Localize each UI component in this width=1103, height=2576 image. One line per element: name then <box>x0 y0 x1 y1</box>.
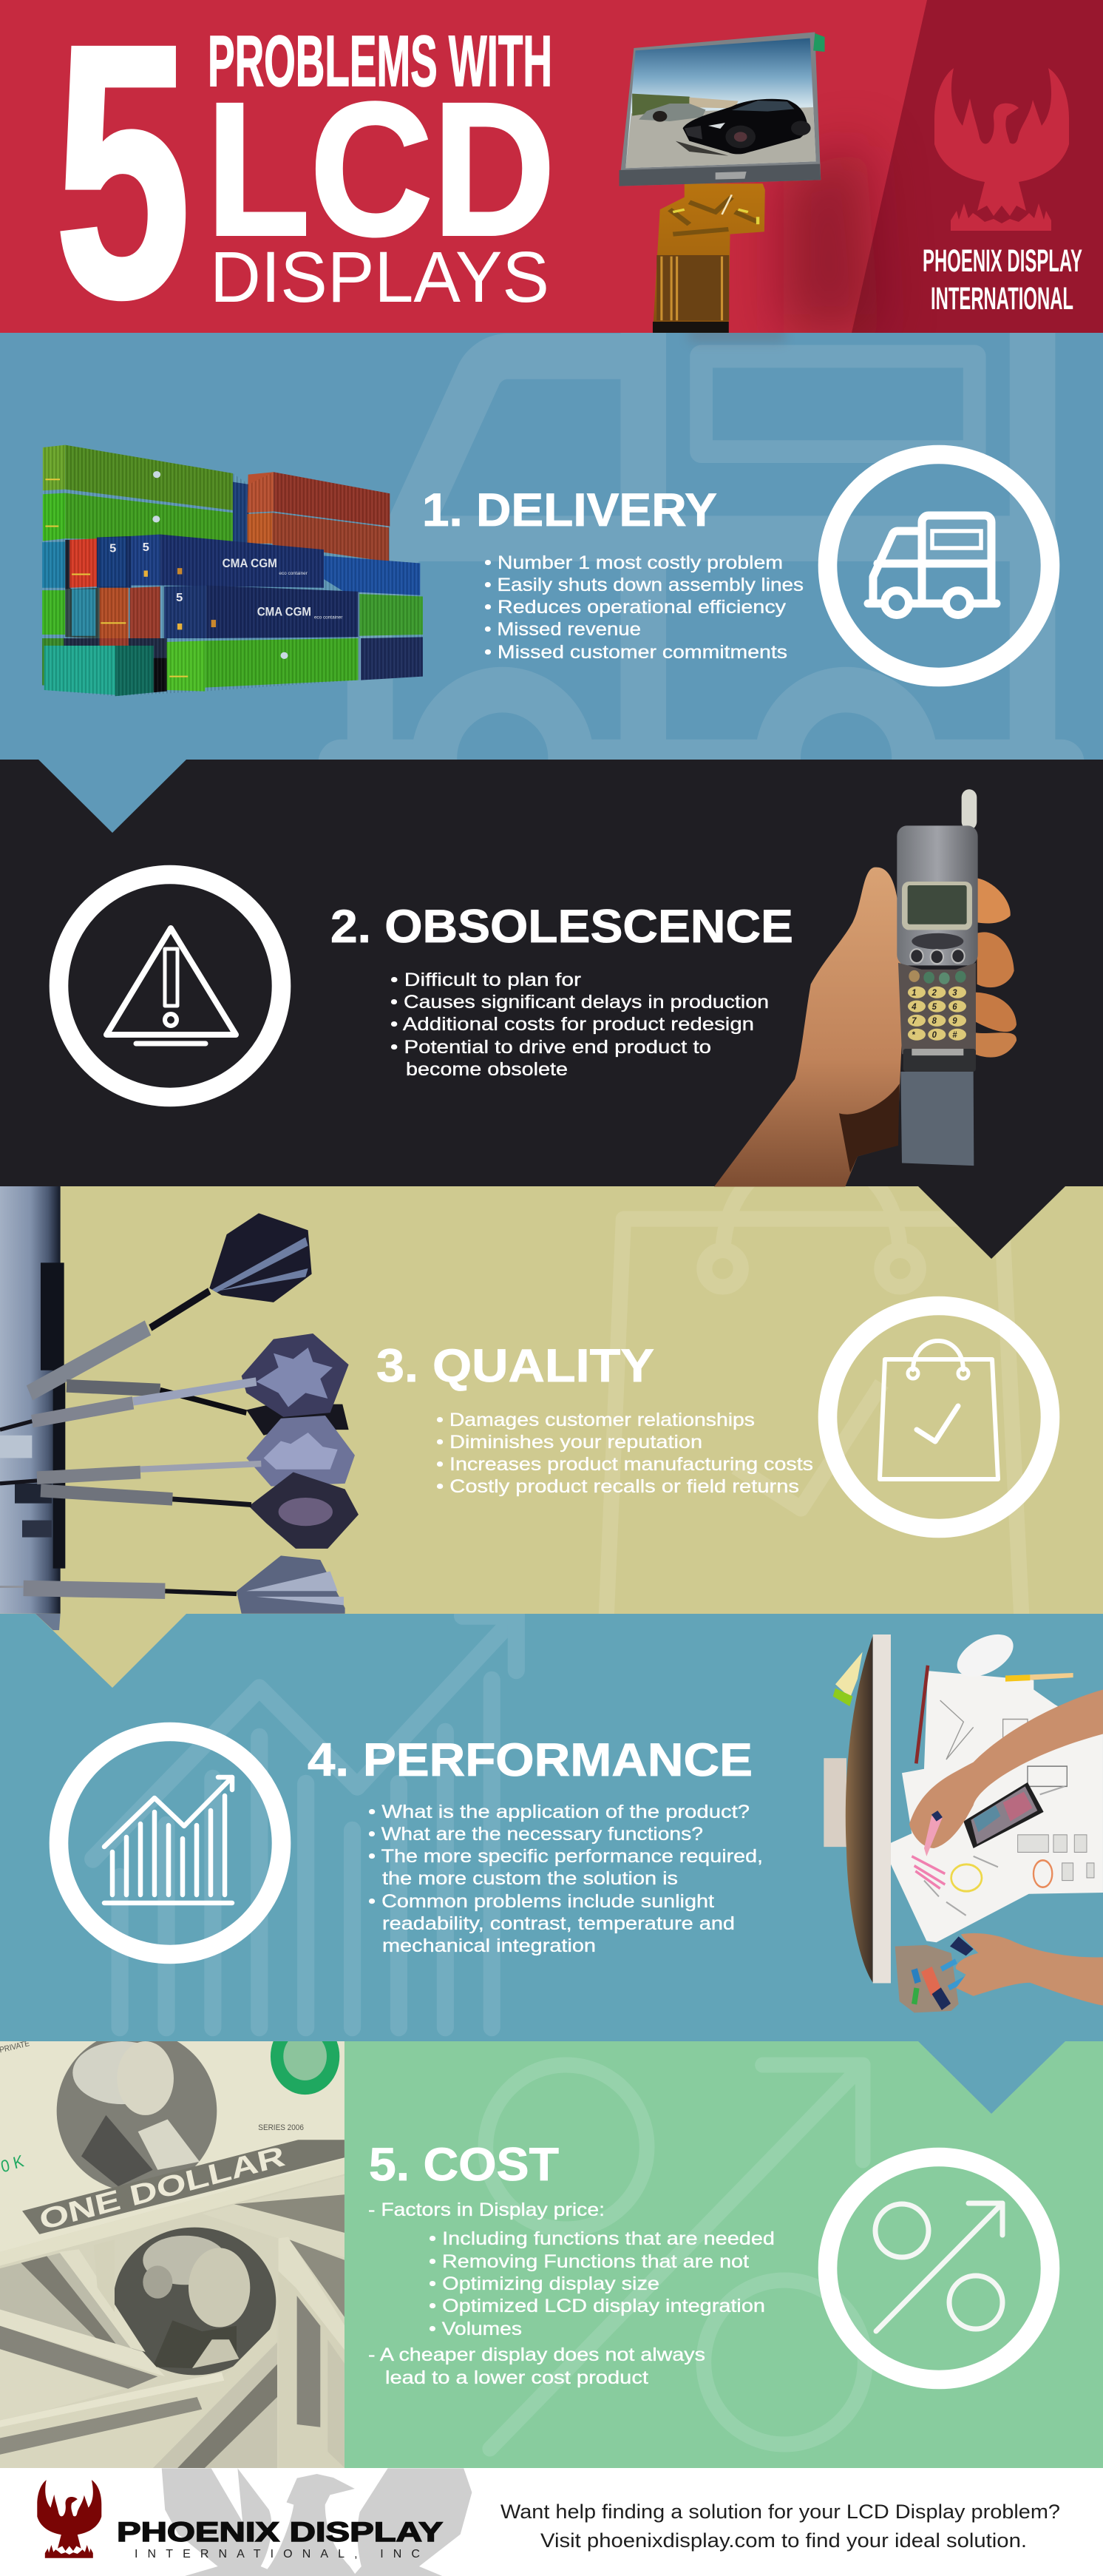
text block: delivery bullets: • Reduces operational efficiency <box>484 597 787 618</box>
text block: delivery bullets: • Number 1 most costly problem <box>484 552 783 573</box>
image: hand holding flip phone: 3 <box>952 987 957 998</box>
image: stacked shipping containers: eco container <box>314 615 342 620</box>
text block: quality bullets: • Costly product recalls or field returns <box>436 1476 799 1497</box>
image: stacked shipping containers: CMA CGM <box>223 556 277 570</box>
panel: section 1 background with truck watermark <box>0 333 1103 760</box>
footer background <box>0 2468 1103 2576</box>
icon: warning triangle in circle <box>59 874 281 1098</box>
heading: 2. Obsolescence: 2. OBSOLESCENCE <box>330 901 793 953</box>
title: 5 Problems with LCD Displays: LCD <box>206 64 555 275</box>
image: hand holding flip phone: # <box>952 1030 957 1040</box>
title: 5 Problems with LCD Displays: DISPLAYS <box>210 237 549 317</box>
text block: obsolescence bullets <box>390 970 769 1080</box>
text block: cost factors: • Including functions that are needed <box>429 2228 775 2249</box>
text block: obsolescence bullets: • Causes significant delays in production <box>390 992 769 1013</box>
text block: performance bullets: the more custom the solution is <box>382 1868 678 1889</box>
logo: phoenix crest in header <box>934 68 1069 231</box>
icon: growth chart in circle <box>59 1732 281 1954</box>
logo wordmark: Phoenix Display International, Inc: INTERNATIONAL, INC <box>135 2548 420 2560</box>
text block: obsolescence bullets: become obsolete <box>406 1059 568 1080</box>
image: hand holding flip phone: 8 <box>932 1015 937 1026</box>
arrow: quality into performance <box>35 1614 186 1688</box>
heading: 4. Performance: 4. PERFORMANCE <box>308 1734 753 1786</box>
heading: Phoenix Display International <box>923 243 1082 317</box>
text block: performance bullets: • What are the necessary functions? <box>368 1824 703 1845</box>
image: darts in a board <box>0 1186 359 1630</box>
image: dollar bills: ONE DOLLAR <box>36 2140 288 2236</box>
heading: 1. Delivery: 1. DELIVERY <box>422 484 717 536</box>
text block: cost factors <box>368 2200 775 2388</box>
panel: section 4 background with chart watermark <box>0 1614 1103 2041</box>
image: hand holding flip phone <box>714 789 1017 1187</box>
text block: performance bullets: • What is the application of the product? <box>368 1802 750 1822</box>
text block: delivery bullets: • Missed revenue <box>484 619 641 640</box>
text block: quality bullets: • Increases product manufacturing costs <box>436 1454 813 1475</box>
text block: footer call to action: Visit phoenixdisplay.com to find your ideal solution. <box>540 2529 1027 2552</box>
text block: cost factors: - Factors in Display price: <box>368 2200 605 2220</box>
title: 5 Problems with LCD Displays <box>55 0 555 371</box>
image: LCD display module <box>620 32 825 333</box>
text block: quality bullets: • Damages customer relationships <box>436 1410 755 1430</box>
text block: quality bullets: • Diminishes your reputation <box>436 1432 702 1453</box>
panel: section 2 background with warning watermark <box>0 760 1103 1186</box>
image: hand holding flip phone: 1 <box>912 987 917 998</box>
image: stacked shipping containers <box>42 445 423 696</box>
image: stacked shipping containers: 5 <box>109 543 116 555</box>
icon: percent with arrow in circle <box>828 2157 1050 2380</box>
text block: cost factors: • Optimizing display size <box>429 2274 659 2294</box>
header logo panel background <box>852 0 1103 333</box>
text block: obsolescence bullets: • Potential to drive end product to <box>390 1037 711 1058</box>
text block: performance bullets: mechanical integration <box>382 1936 596 1956</box>
title: 5 Problems with LCD Displays: PROBLEMS WITH <box>208 21 552 101</box>
image: stacked shipping containers: eco container <box>279 571 308 576</box>
image: stacked shipping containers: CMA CGM <box>257 604 311 618</box>
text block: cost factors: • Removing Functions that are not <box>429 2251 749 2272</box>
panel: section 3 background with shopping bag watermark <box>0 1186 1103 1614</box>
image: hand holding flip phone: 7 <box>912 1015 917 1026</box>
image: hand holding flip phone: 9 <box>952 1015 957 1026</box>
arrow: delivery into obsolescence <box>38 760 186 833</box>
image: stacked shipping containers: 5 <box>176 592 183 604</box>
image: hand holding flip phone: * <box>912 1030 916 1040</box>
icon: truck in circle <box>828 454 1050 677</box>
text block: performance bullets: • The more specific performance required, <box>368 1846 763 1867</box>
image: dollar bills: SERIES 2006 <box>258 2123 304 2132</box>
text block: footer call to action: Want help finding a solution for your LCD Display problem? <box>500 2501 1060 2523</box>
text block: cost factors: • Volumes <box>429 2319 522 2339</box>
image: hand holding flip phone: 6 <box>952 1001 957 1012</box>
text block: cost factors: lead to a lower cost product <box>385 2367 648 2388</box>
text block: performance bullets <box>368 1802 763 1956</box>
image: dollar bills <box>0 2018 345 2468</box>
panel: section 5 background with percent watermark <box>345 2041 1103 2468</box>
text block: cost factors: - A cheaper display does not always <box>368 2345 705 2365</box>
text block: delivery bullets <box>484 552 804 663</box>
image: hand holding flip phone: 2 <box>931 987 937 998</box>
heading: 5. Cost: 5. COST <box>369 2139 559 2191</box>
image: hand holding flip phone: 0 <box>932 1030 937 1040</box>
text block: performance bullets: • Common problems include sunlight <box>368 1891 714 1912</box>
image: desk with monitor, sketches, phone and hands <box>824 1626 1103 2012</box>
image: stacked shipping containers: 5 <box>143 541 149 554</box>
arrow: performance into cost <box>918 2041 1065 2114</box>
image: hand holding flip phone: 4 <box>911 1001 917 1012</box>
icon: shopping bag in circle <box>828 1306 1050 1528</box>
text block: obsolescence bullets: • Difficult to plan for <box>390 970 581 990</box>
text block: performance bullets: readability, contrast, temperature and <box>382 1913 735 1934</box>
logo wordmark: Phoenix Display International, Inc <box>117 2517 443 2560</box>
image: hand holding flip phone: 5 <box>932 1001 937 1012</box>
panel shadow <box>784 141 880 333</box>
text block: footer call to action <box>500 2501 1060 2552</box>
text block: delivery bullets: • Missed customer commitments <box>484 642 787 663</box>
logo wordmark: Phoenix Display International, Inc: PHOENIX DISPLAY <box>117 2517 443 2547</box>
header background <box>0 0 1103 333</box>
text block: quality bullets <box>436 1410 813 1497</box>
text block: cost factors: • Optimized LCD display integration <box>429 2296 765 2316</box>
logo: dark red phoenix crest <box>37 2480 101 2558</box>
heading: 3. Quality: 3. QUALITY <box>376 1340 654 1392</box>
footer grey phoenix watermark <box>162 2468 472 2576</box>
arrow: obsolescence into quality <box>918 1186 1065 1259</box>
text block: delivery bullets: • Easily shuts down assembly lines <box>484 575 804 595</box>
text block: obsolescence bullets: • Additional costs for product redesign <box>390 1014 754 1035</box>
